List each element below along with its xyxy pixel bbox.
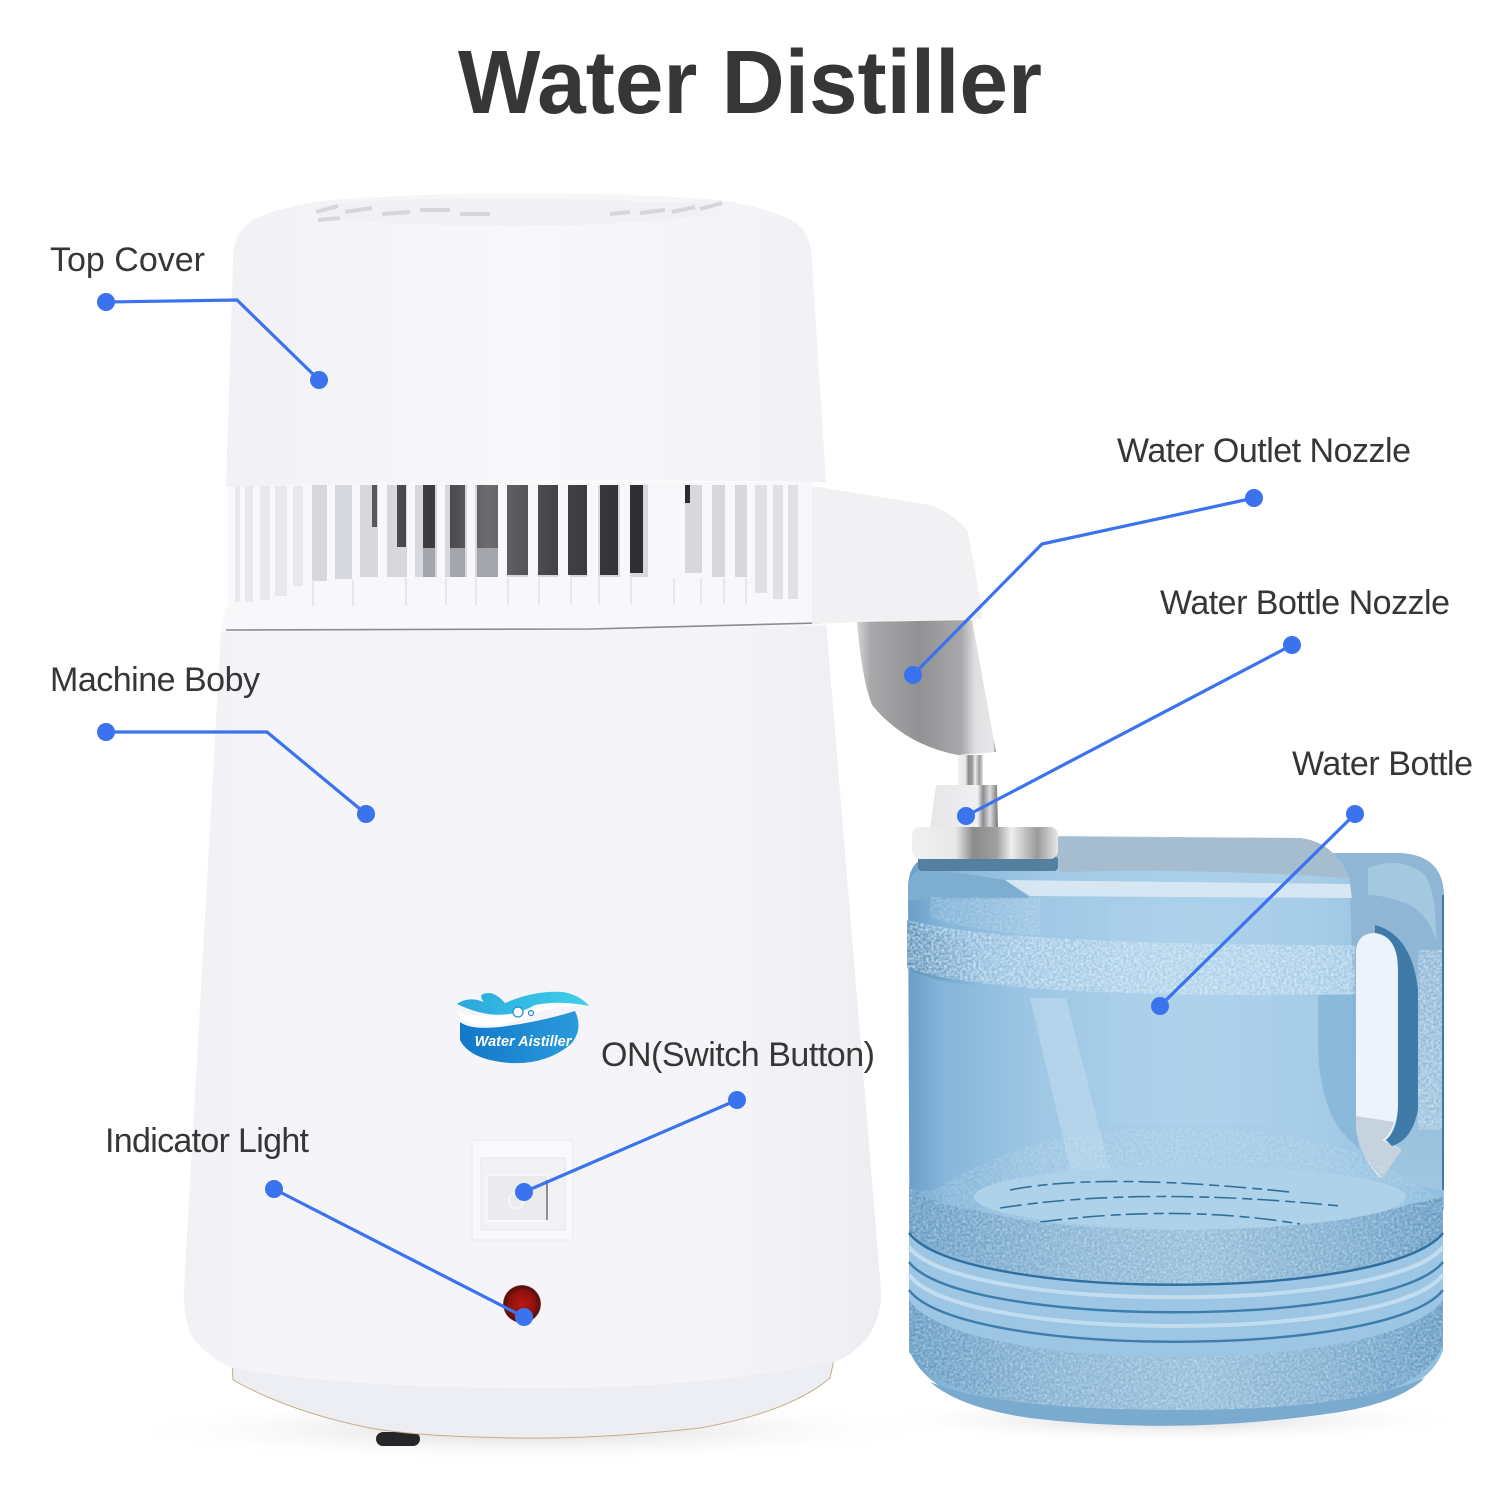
logo blue badge	[460, 1011, 579, 1063]
bottle thread ribs	[909, 1233, 1443, 1357]
floor ring lines	[1000, 1181, 1340, 1224]
water bottle	[860, 755, 1480, 1444]
label: on switch button: ON(Switch Button)	[601, 1036, 875, 1074]
label: machine body: Machine Boby	[50, 661, 260, 699]
neck rod	[958, 755, 983, 787]
brand logo	[457, 992, 589, 1063]
upper texture band left shade	[907, 920, 985, 986]
label: water outlet nozzle: Water Outlet Nozzle	[1117, 432, 1411, 470]
label: top cover: Top Cover	[50, 241, 205, 279]
logo white swoosh	[458, 1001, 588, 1026]
switch frame	[481, 1158, 565, 1230]
vent slots centre	[312, 485, 747, 581]
lid neck	[918, 856, 1058, 871]
lower band	[221, 604, 826, 632]
bottom texture band	[909, 1300, 1443, 1410]
machine foot	[376, 1432, 420, 1446]
coil lower shade	[423, 548, 498, 577]
shoulder highlight	[1005, 880, 1352, 898]
bottle floor ellipse	[974, 1166, 1406, 1228]
logo wave	[457, 992, 589, 1015]
switch mark: O	[507, 1188, 525, 1215]
outlet arm	[812, 486, 982, 624]
upper texture band	[907, 920, 1355, 995]
handle top highlight	[1368, 863, 1436, 940]
upper faint texture	[930, 897, 1040, 935]
glass right shade	[1318, 995, 1360, 1150]
switch	[472, 1140, 573, 1240]
handle texture	[1418, 950, 1443, 1130]
indicator light	[503, 1285, 541, 1323]
vent backing	[228, 482, 812, 606]
lower texture band	[909, 1187, 1443, 1285]
ground shadow	[110, 1396, 950, 1464]
label: water bottle nozzle: Water Bottle Nozzle	[1160, 584, 1450, 622]
leader dots	[97, 293, 1364, 1326]
label: indicator light: Indicator Light	[105, 1122, 310, 1160]
seam line	[226, 623, 818, 630]
leader lines	[106, 300, 1355, 1317]
lower slot lines	[312, 578, 747, 606]
bottle glass	[908, 836, 1443, 1426]
label: water bottle: Water Bottle	[1292, 745, 1473, 783]
top grille	[316, 198, 722, 226]
neck cap	[930, 785, 998, 830]
vent section	[228, 482, 812, 606]
machine base	[232, 1355, 835, 1438]
steel coil through slots	[372, 485, 690, 575]
handle opening floor	[1356, 1116, 1402, 1178]
machine body	[184, 622, 881, 1388]
bottom glass rim	[930, 1378, 1425, 1426]
logo bubbles	[513, 1007, 534, 1017]
lower dome texture	[909, 1128, 1443, 1240]
handle inner dark strip	[1375, 925, 1418, 1146]
metal spout	[857, 620, 996, 755]
chrome lid	[912, 827, 1058, 859]
bottle shadow	[860, 1396, 1480, 1444]
title: Water Distiller	[458, 33, 1042, 133]
handle outer edge	[1442, 895, 1444, 1190]
vent slot shadows left	[235, 486, 303, 602]
bottle handle	[1330, 853, 1444, 1210]
bottle shoulder	[1050, 837, 1348, 878]
switch rocker	[487, 1175, 548, 1221]
glass light streak	[1030, 998, 1120, 1210]
switch plate	[472, 1140, 573, 1240]
logo text: Water Aistiller	[475, 1034, 573, 1050]
handle opening	[1356, 933, 1402, 1178]
glass centre highlight	[1110, 905, 1270, 1125]
shoulder left shade	[908, 868, 1030, 900]
top cover	[226, 193, 826, 487]
vent slots right	[755, 485, 798, 599]
rocker side	[546, 1180, 548, 1220]
bottle thread lines	[909, 1233, 1443, 1342]
water distiller machine	[110, 193, 996, 1464]
